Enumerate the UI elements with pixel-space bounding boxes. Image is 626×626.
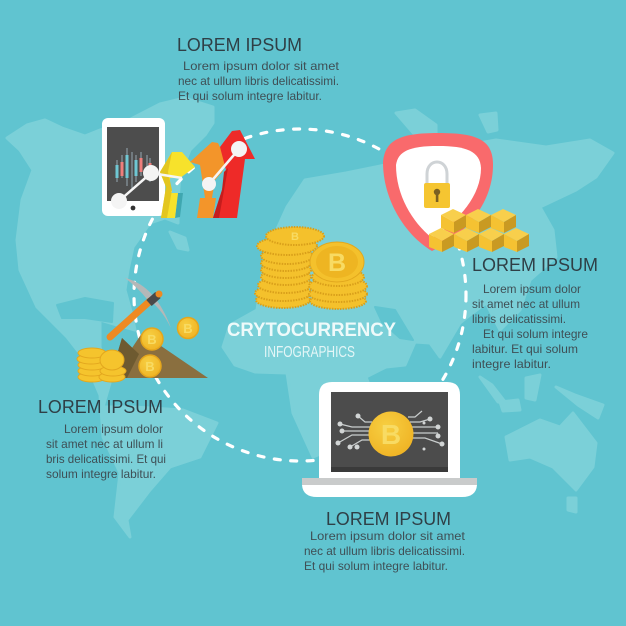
icon: gold cubes	[429, 209, 529, 252]
text block: left: sit amet nec at ullum li	[46, 437, 163, 451]
icon: tablet	[102, 118, 165, 216]
icon: padlock	[424, 162, 450, 208]
text block: right: Et qui solum integre	[483, 327, 588, 341]
bitcoin marks: B	[147, 332, 157, 347]
text block: top: Lorem ipsum dolor sit amet	[183, 59, 340, 73]
icon: orange arrow	[190, 142, 227, 218]
icon: laptop body	[319, 382, 460, 478]
text block: top: nec at ullum libris delicatissimi.	[178, 74, 339, 88]
world map	[7, 98, 613, 537]
icon: pickaxe	[110, 278, 171, 337]
title: INFOGRAPHICS	[264, 344, 355, 361]
icon: yellow arrow	[160, 152, 195, 218]
text block: left: Lorem ipsum dolor	[64, 422, 163, 436]
panel: charts on tablet	[102, 118, 255, 218]
text block: bottom	[304, 509, 466, 573]
text block: bottom: Lorem ipsum dolor sit amet	[310, 529, 466, 543]
text block: right	[472, 255, 598, 371]
text block: left: bris delicatissimi. Et qui	[46, 452, 166, 466]
icon: large coin: B	[328, 249, 346, 277]
title	[227, 320, 396, 361]
icon: bitcoin coin: B	[381, 419, 401, 450]
text block: right: Lorem ipsum dolor	[483, 282, 581, 296]
bitcoin marks	[145, 321, 193, 374]
text block: top: LOREM IPSUM	[177, 35, 302, 55]
text block: right: integre labitur.	[472, 357, 551, 371]
icon: laptop base	[302, 478, 477, 497]
seas	[57, 195, 585, 340]
icon: mountain	[110, 333, 208, 378]
text block: bottom: nec at ullum libris delicatissimi.	[304, 544, 465, 558]
bitcoin marks: B	[145, 359, 155, 374]
icon: circuit traces	[336, 411, 444, 450]
panel: mining	[77, 278, 208, 382]
icon: bitcoin coins	[139, 318, 198, 377]
panel: shield security	[383, 133, 529, 252]
text block: bottom: Et qui solum integre labitur.	[304, 559, 448, 573]
dashed circle connector	[134, 129, 466, 461]
icon: bitcoin coin	[368, 412, 414, 456]
text block: left: solum integre labitur.	[46, 467, 156, 481]
title: CRYTOCURRENCY	[227, 320, 396, 341]
text block: right: LOREM IPSUM	[472, 255, 598, 275]
icon: laptop screen	[331, 392, 448, 472]
text block: right: sit amet nec at ullum	[472, 297, 580, 311]
text block: top	[177, 35, 340, 103]
icon: right stack	[309, 268, 367, 309]
icon: coin stack	[77, 348, 126, 382]
coin mark: B	[291, 231, 299, 243]
bitcoin marks: B	[183, 321, 193, 336]
text block: left	[38, 397, 166, 481]
icon: line graph	[111, 141, 247, 209]
text block: left: LOREM IPSUM	[38, 397, 163, 417]
text block: right: libris delicatissimi.	[472, 312, 566, 326]
icon: shield	[383, 133, 493, 251]
panel: laptop	[302, 382, 477, 497]
central coin stacks	[255, 227, 367, 309]
icon: left stack	[255, 227, 324, 308]
text block: right: labitur. Et qui solum	[472, 342, 578, 356]
text block: top: Et qui solum integre labitur.	[178, 89, 322, 103]
icon: red arrow	[213, 130, 255, 218]
text block: bottom: LOREM IPSUM	[326, 509, 451, 529]
